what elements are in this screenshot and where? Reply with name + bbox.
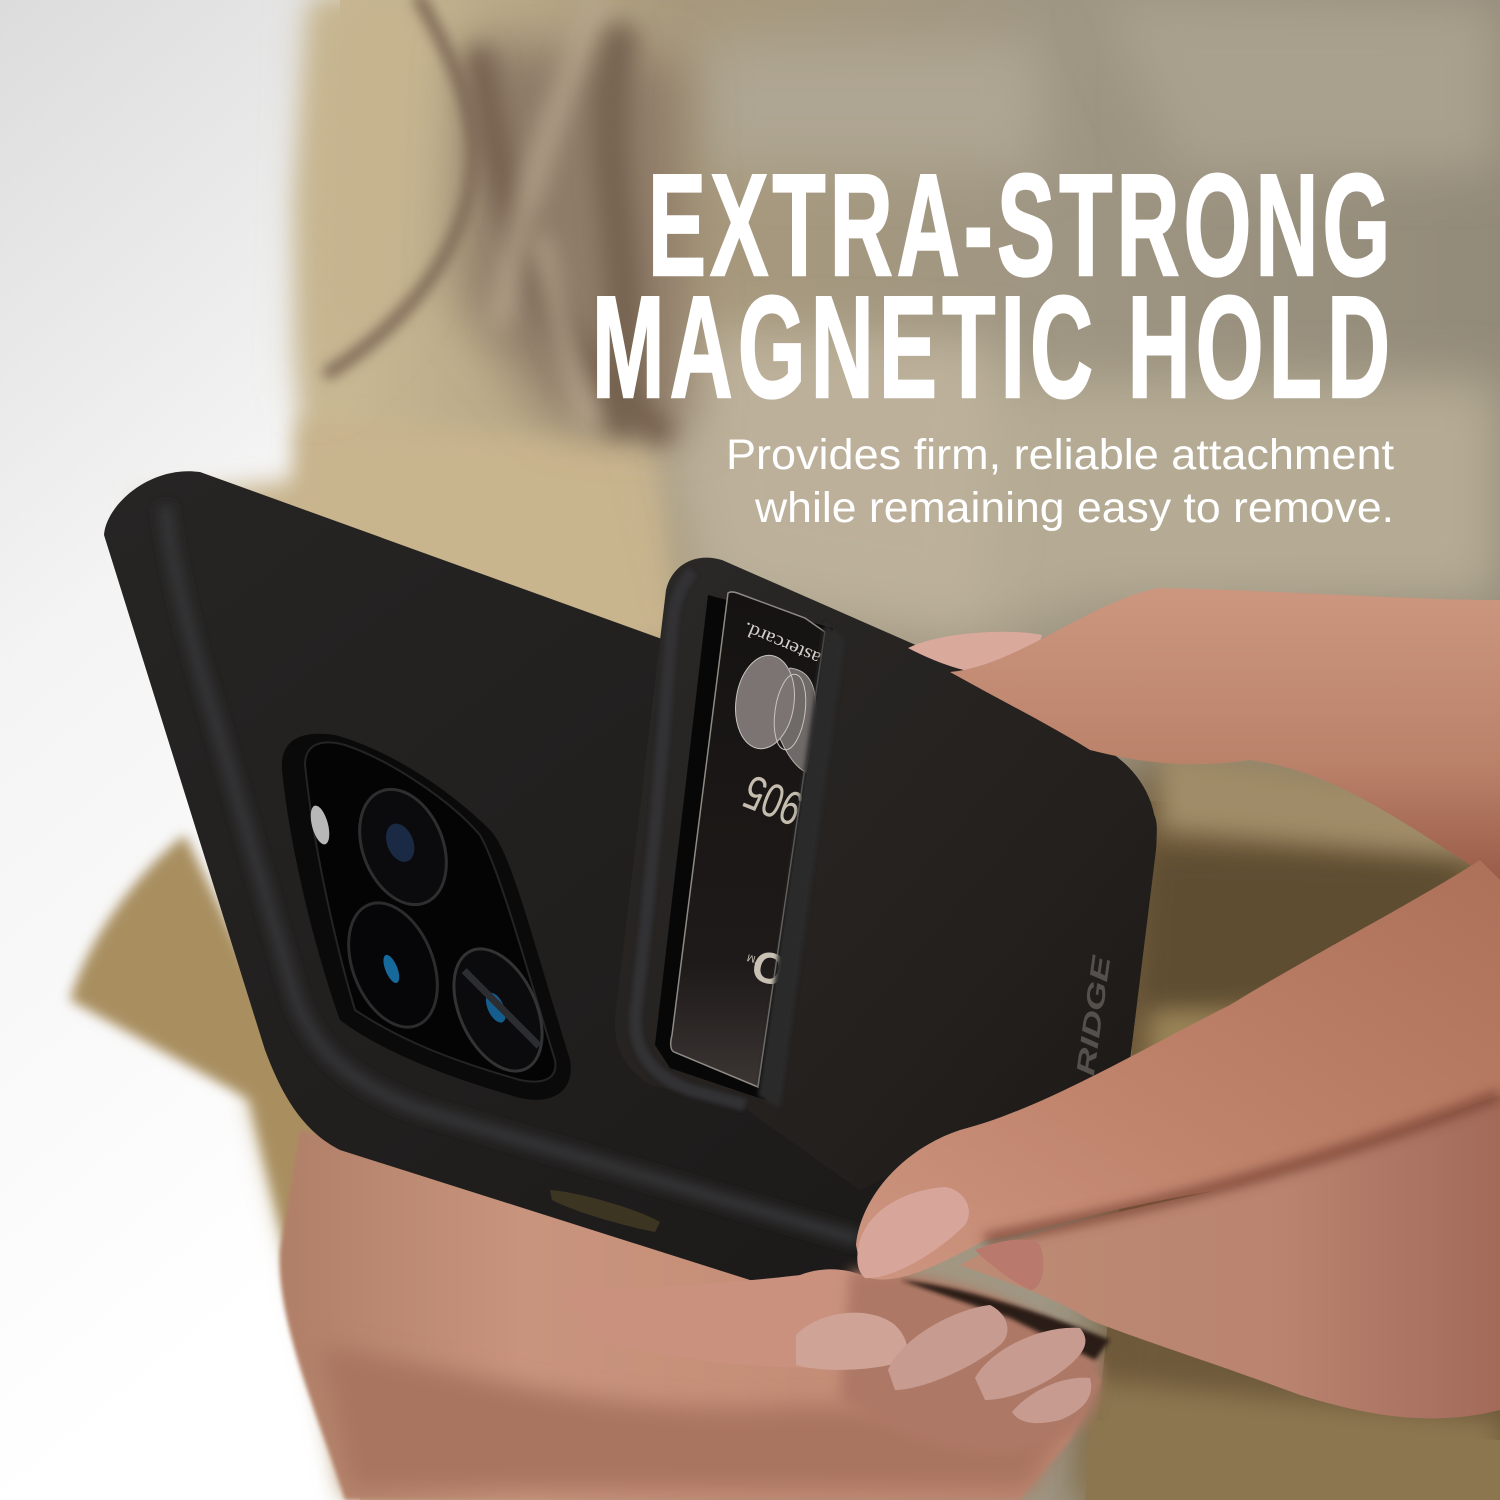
camera surround: [282, 734, 571, 1100]
flash: [307, 804, 333, 846]
second hidden nail: [975, 1240, 1043, 1290]
card trademark glyph: O: [747, 939, 793, 996]
dark phone shadow below fingers: [900, 1280, 1110, 1360]
wallet brand text: RIDGE: [1070, 953, 1116, 1077]
magnetic wallet: [615, 558, 1157, 1190]
side button: [550, 1190, 660, 1232]
camera inner edge: [305, 742, 555, 1082]
thumb nail: [857, 1187, 969, 1278]
wallet body: [615, 558, 1157, 1190]
thumb: [856, 860, 1500, 1280]
thumb crease shadow: [985, 1095, 1500, 1240]
card face: [671, 592, 825, 1087]
lens top: [343, 776, 463, 918]
card brand text: astercard.: [740, 617, 824, 669]
index finger: [950, 588, 1500, 880]
index fingernail: [908, 632, 1042, 675]
headline line 1: EXTRA-STRONG: [648, 145, 1390, 307]
fingers behind nails: [840, 1270, 1101, 1452]
phone body: [104, 471, 1157, 1285]
phone case: [104, 471, 1157, 1285]
camera island: [282, 734, 571, 1100]
lens middle: [332, 890, 454, 1040]
left hand fingers: [320, 1269, 1110, 1490]
card TM: TM: [746, 951, 763, 966]
card: [671, 592, 825, 1087]
subheading line 1: Provides firm, reliable attachment: [726, 431, 1394, 479]
subheading: [726, 431, 1394, 532]
wallet raised rim: [635, 572, 745, 1105]
hair strands: [330, 0, 690, 430]
lower finger: [960, 1090, 1500, 1418]
left nails: [796, 1305, 1091, 1423]
finger curve: [560, 1269, 905, 1368]
left finger shading: [320, 1345, 1080, 1490]
right hand fingers: [856, 588, 1500, 1418]
card slot: [655, 595, 833, 1100]
card logo circles: [730, 651, 816, 772]
headline: [592, 145, 1390, 429]
lens right: [436, 935, 560, 1085]
headline line 2: MAGNETIC HOLD: [592, 267, 1390, 429]
wallet frame band: [758, 622, 845, 1108]
phone side rim highlight: [165, 505, 860, 1240]
lower hand palm behind phone: [280, 1130, 1100, 1500]
subheading line 2: while remaining easy to remove.: [754, 484, 1394, 532]
card number: 905: [736, 764, 810, 835]
